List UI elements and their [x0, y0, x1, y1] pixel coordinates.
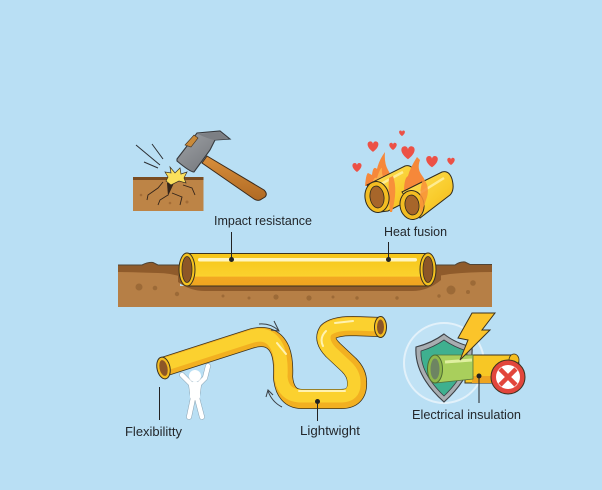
- shield: [416, 334, 472, 402]
- icon: person lifting pipe: [182, 366, 208, 417]
- label: Electrical insulation: Electrical insulation: [412, 407, 521, 422]
- motion arrow: top: [259, 321, 279, 331]
- left pipe: [367, 166, 420, 212]
- hearts: [352, 130, 455, 172]
- leader dot: electrical insulation: [476, 374, 482, 403]
- label: Impact resistance: Impact resistance: [214, 213, 312, 228]
- label: Lightwight: Lightwight: [300, 423, 360, 438]
- icon: hammer striking cracked ground: [133, 131, 266, 211]
- yellow pipe: [179, 253, 436, 286]
- pipe ends: [363, 180, 391, 214]
- hammer head: [177, 131, 230, 172]
- pipe behind shield: [465, 354, 519, 383]
- flames in front: [420, 178, 428, 215]
- bendy yellow pipe: [155, 316, 386, 399]
- halo ring: [404, 323, 484, 403]
- main pipe in ground: [118, 232, 492, 307]
- icon: electrical insulation: [404, 313, 525, 403]
- ground cross-section: [118, 262, 492, 307]
- impact spark: [165, 167, 187, 185]
- right pipe: [402, 172, 453, 218]
- prohibition sign: [491, 360, 525, 394]
- cracked ground block: [133, 177, 204, 211]
- motion lines: [136, 144, 163, 168]
- flames behind pipes: [365, 152, 391, 186]
- leader: impact resistance: [229, 232, 234, 262]
- label: Heat fusion: Heat fusion: [384, 224, 447, 239]
- leader: lightweight: [315, 399, 320, 421]
- motion arrow: bottom: [266, 390, 282, 407]
- lightning bolt: [458, 313, 495, 360]
- label: Flexibilitty: Flexibilitty: [125, 424, 182, 439]
- leader: heat fusion: [386, 242, 391, 262]
- leader: flexibility: [158, 387, 160, 420]
- icon: heat fusion pipes with flames and hearts: [352, 130, 455, 221]
- insulated pipe segment in shield: [428, 355, 473, 383]
- flames between pipes: [389, 176, 395, 212]
- hammer handle: [202, 156, 266, 200]
